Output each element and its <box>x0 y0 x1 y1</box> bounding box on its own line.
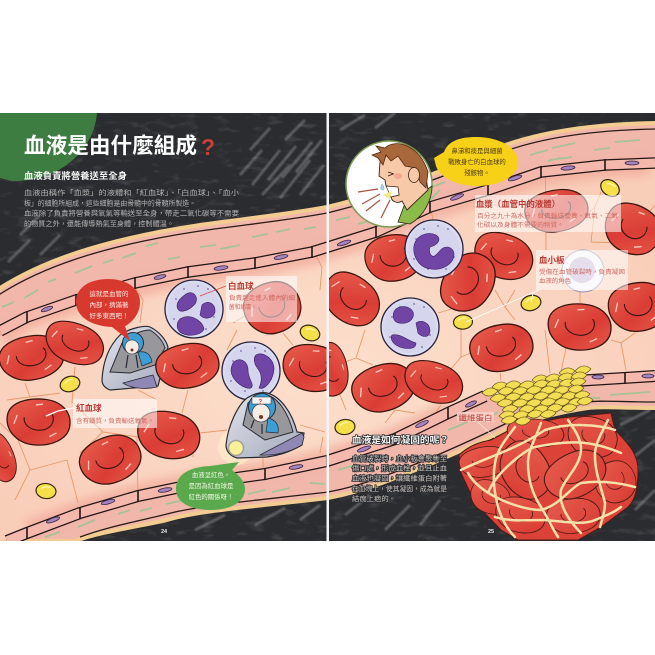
label: red blood cell: 含有鐵質，負責輸送氧氣。 <box>76 417 154 425</box>
boy shirt <box>398 186 432 224</box>
right page red cells <box>308 186 655 418</box>
speech bubble: vessel interior: 內部，擠滿著 <box>90 300 129 309</box>
yellow platelet mesh <box>482 366 593 425</box>
red blood cells <box>0 186 655 491</box>
label: fibrin: 纖維蛋白 <box>458 412 492 422</box>
vessel wall <box>0 123 655 541</box>
label: plasma: 化碳以及身體不需要的物質。 <box>477 221 564 229</box>
label: plasma: 血漿（血管中的液體） <box>476 199 560 209</box>
label: platelet: 血小板 <box>539 255 565 265</box>
heading: how blood clots: 血液是如何凝固的呢？ <box>352 434 449 445</box>
boy ear <box>408 168 420 182</box>
tissue polygon lines <box>0 173 655 503</box>
speech bubble: vessel interior: 好多東西吧！ <box>90 311 128 320</box>
green title circle <box>0 113 97 181</box>
label: white blood cell: 白血球 <box>228 281 254 291</box>
ship 1 <box>102 326 168 390</box>
chalk streaks <box>8 113 655 530</box>
intro paragraph: 的物質之外，還能傳導熱氣至身體，控制體溫。 <box>24 219 174 228</box>
clotting paragraph: 在血塊上，使其凝固，成為就是 <box>352 484 447 493</box>
bottom wall nuclei <box>46 374 654 524</box>
label: white blood cell: 負責趕走進入體內的細 <box>229 294 295 302</box>
boy face <box>379 152 428 210</box>
top wall cells <box>0 159 655 331</box>
speech bubble: mucus: 戰敗身亡的白血球的 <box>448 157 506 166</box>
speech bubble: vessel interior: 這就是血管的 <box>90 289 129 298</box>
speech bubble: red colour <box>176 462 245 510</box>
speech bubble: red colour: 紅色的關係呀！ <box>189 492 233 501</box>
boy blush and eye <box>388 172 394 176</box>
page number left: 24 <box>161 529 168 535</box>
blood clot <box>457 366 641 540</box>
label: platelet <box>466 250 628 322</box>
bottom margin <box>0 541 655 655</box>
fibrin strands <box>461 420 635 537</box>
speech bubble: vessel interior <box>76 279 140 341</box>
subheading: 血液負責將營養送至全身 <box>24 170 127 181</box>
clotting paragraph <box>352 454 447 503</box>
yellow platelets <box>35 176 622 500</box>
top wall nuclei <box>41 161 639 313</box>
boy mouth <box>386 186 399 197</box>
vessel lumen <box>0 163 655 541</box>
bottom wall cells <box>7 372 655 541</box>
white page divider <box>326 113 329 541</box>
speech bubble: mucus: 殘骸物。 <box>464 168 490 177</box>
label: plasma <box>475 195 621 232</box>
intro paragraph <box>24 188 239 228</box>
intro paragraph: 血液由稱作「血漿」的液體和「紅血球」、「白血球」、「血小 <box>24 188 239 197</box>
pale platelet cell <box>562 250 604 292</box>
lumen rose shading <box>2 168 650 528</box>
spray droplets <box>383 191 392 199</box>
speech bubble: red colour: 是因為紅血球是 <box>189 481 234 490</box>
intro paragraph: 板」的細胞所組成，這些細胞是由骨髓中的骨髓所製造。 <box>24 198 196 208</box>
boy coughing circle <box>346 141 432 227</box>
ship 2 <box>218 393 304 465</box>
clot red mass <box>457 410 641 540</box>
clotting paragraph: 血管破裂時，血小板會聚集至 <box>352 454 447 463</box>
speech bubble: mucus: 鼻涕和痰是與細菌 <box>451 146 503 155</box>
label: fibrin <box>457 412 495 438</box>
speech bubble: mucus <box>434 137 518 186</box>
label: platelet: 受傷在血管破裂時，負責凝固 <box>539 268 625 276</box>
label: platelet: 血液的角色 <box>539 277 571 285</box>
blood vessel <box>0 123 655 541</box>
book spread background <box>0 113 655 541</box>
label: red blood cell: 紅血球 <box>76 403 102 413</box>
clotting paragraph: 血液也凝固，讓纖維蛋白附著 <box>352 474 447 482</box>
intro paragraph: 血液除了負責將營養與氧氣等輸送至全身，帶走二氧化碳等不需要 <box>24 208 239 218</box>
label: white blood cell: 菌和病毒。 <box>229 303 257 311</box>
label: red blood cell <box>46 399 157 428</box>
cough lines <box>358 189 390 218</box>
wall green dashes <box>2 140 650 537</box>
left page red cells <box>0 280 326 485</box>
boy hair <box>372 144 428 188</box>
page number right: 25 <box>488 529 494 535</box>
white blood cells <box>165 220 463 400</box>
clotting paragraph: 傷口處，形成血栓，並且止血 <box>352 464 447 472</box>
label: plasma: 百分之九十為水分，負責輸送營養、氧氣、二氧 <box>477 212 618 220</box>
speech bubble: red colour: 血液呈紅色， <box>192 470 230 479</box>
label: white blood cell <box>200 276 297 322</box>
clotting paragraph: 結痂上疤的。 <box>352 494 396 503</box>
ship 2: ? <box>258 400 262 406</box>
title: 血液是由什麼組成 <box>24 134 197 158</box>
title question mark: ? <box>201 134 215 160</box>
